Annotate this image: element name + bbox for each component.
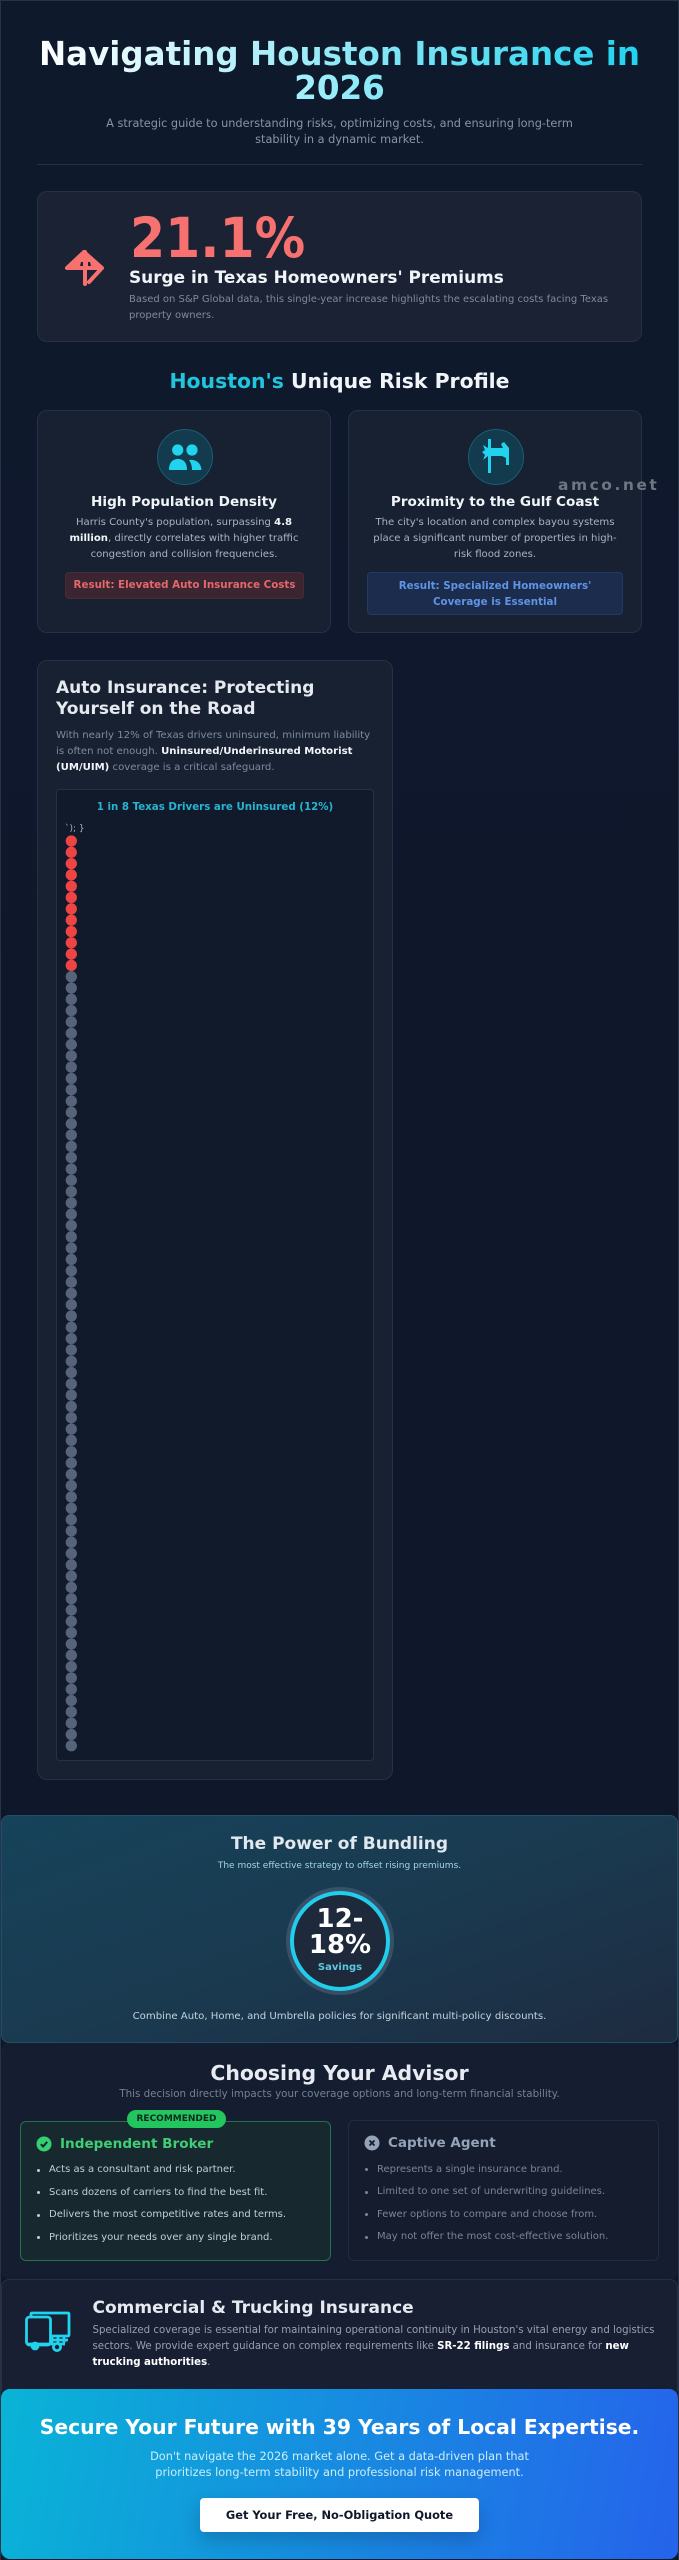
savings percentage: 18%: [309, 1930, 371, 1960]
subtitle: stability in a dynamic market.: [255, 132, 424, 146]
big number: 21.1%: [130, 205, 305, 270]
stat description: property owners.: [129, 310, 214, 320]
advisor subtitle: This decision directly impacts your coverage options and long-term financial stability.: [119, 2088, 560, 2100]
cta subtitle: prioritizes long-term stability and professional risk management.: [155, 2465, 524, 2479]
card body: place a significant number of properties in high-: [373, 533, 617, 544]
subtitle: [106, 116, 573, 146]
agent list: [365, 2164, 608, 2242]
card body: Harris County's population, surpassing 4.8: [76, 517, 292, 528]
icon: x circle: [364, 2136, 380, 2150]
card body: million, directly correlates with higher traffic: [69, 533, 298, 544]
broker list: Scans dozens of carriers to find the best fit.: [49, 2187, 267, 2198]
result callout: [367, 572, 623, 615]
card body: The city's location and complex bayou systems: [375, 517, 615, 528]
panel: commercial and trucking: [1, 2279, 678, 2397]
chart title: 1 in 8 Texas Drivers are Uninsured (12%): [97, 801, 333, 813]
panel: choosing your advisor: [1, 2043, 678, 2279]
result callout: Result: Specialized Homeowners': [399, 580, 591, 592]
stat heading: Surge in Texas Homeowners' Premiums: [129, 267, 504, 287]
auto description: (UM/UIM) coverage is a critical safeguard.: [56, 762, 275, 773]
header divider: [37, 164, 642, 165]
savings label: Savings: [318, 1962, 362, 1973]
auto description: [56, 730, 370, 773]
auto heading: Auto Insurance: Protecting: [56, 678, 314, 698]
recommended badge: [127, 2110, 226, 2128]
auto description: With nearly 12% of Texas drivers uninsured, minimum liability: [56, 730, 370, 741]
icon: check circle: [36, 2136, 52, 2152]
savings percentage: [309, 1904, 371, 1960]
dot chart: uninsured drivers: [66, 835, 77, 1752]
panel: uninsured drivers chart: [56, 789, 374, 1761]
broker list: [37, 2164, 286, 2243]
card body: risk flood zones.: [454, 549, 536, 560]
commercial body: Specialized coverage is essential for maintaining operational continuity in Houston's vital energy and logistics: [92, 2325, 654, 2336]
red dots: uninsured: [66, 841, 77, 966]
cta button: [200, 2498, 479, 2532]
result callout: Result: Elevated Auto Insurance Costs: [74, 579, 295, 591]
agent list: Fewer options to compare and choose from.: [377, 2209, 597, 2220]
agent list: May not offer the most cost-effective solution.: [377, 2231, 608, 2242]
cta title: Secure Your Future with 39 Years of Local Expertise.: [40, 2415, 639, 2439]
result callout: Coverage is Essential: [433, 596, 557, 608]
bundling subtitle: The most effective strategy to offset rising premiums.: [218, 1861, 461, 1871]
auto heading: [56, 678, 314, 719]
card body: congestion and collision frequencies.: [91, 549, 277, 560]
broker heading: Independent Broker: [60, 2136, 213, 2152]
card heading: Proximity to the Gulf Coast: [391, 494, 599, 510]
broker list: Delivers the most competitive rates and terms.: [49, 2209, 286, 2220]
auto heading: Yourself on the Road: [56, 699, 256, 719]
card body: [69, 517, 298, 560]
icon: people: [157, 429, 213, 485]
subtitle: A strategic guide to understanding risks, optimizing costs, and ensuring long-term: [106, 116, 573, 130]
card body: [373, 517, 617, 560]
watermark: amco.net: [558, 476, 659, 494]
panel: independent broker: [20, 2121, 331, 2261]
panel: high population density: [37, 410, 331, 633]
commercial body: sectors. We provide expert guidance on complex requirements like SR-22 filings and insurance for new: [92, 2341, 629, 2352]
icon: truck: [25, 2312, 70, 2352]
agent heading: Captive Agent: [388, 2135, 496, 2151]
header: [37, 35, 642, 165]
commercial body: [92, 2325, 654, 2368]
icon: surge arrow: [64, 250, 104, 286]
stray code text: `); }: [65, 824, 85, 834]
cta button: Get Your Free, No-Obligation Quote: [226, 2508, 453, 2522]
auto description: is often not enough. Uninsured/Underinsured Motorist: [56, 746, 352, 757]
panel: auto insurance: [37, 660, 393, 1780]
gray dots: insured: [66, 977, 77, 1747]
agent list: Represents a single insurance brand.: [377, 2164, 563, 2174]
icon: flood marker: [468, 429, 524, 485]
bundling title: The Power of Bundling: [231, 1834, 448, 1854]
savings circle: [290, 1891, 390, 1991]
cta subtitle: [150, 2449, 529, 2479]
cta subtitle: Don't navigate the 2026 market alone. Get a data-driven plan that: [150, 2449, 529, 2463]
panel: captive agent: [348, 2120, 659, 2261]
recommended badge: RECOMMENDED: [136, 2114, 216, 2124]
result callout: [65, 572, 304, 599]
card heading: High Population Density: [91, 494, 277, 510]
title: Navigating Houston Insurance in: [39, 35, 640, 73]
agent list: Limited to one set of underwriting guidelines.: [377, 2186, 605, 2197]
broker list: Acts as a consultant and risk partner.: [49, 2164, 236, 2175]
panel: premium surge stat: [37, 191, 642, 342]
broker list: Prioritizes your needs over any single brand.: [49, 2232, 273, 2243]
title: [0, 37, 679, 105]
title: 2026: [294, 69, 385, 107]
panel: power of bundling: [1, 1815, 678, 2043]
stat description: Based on S&P Global data, this single-year increase highlights the escalating costs facing Texas: [129, 294, 608, 304]
panel: proximity to gulf coast: [348, 410, 642, 633]
stat description: [129, 294, 608, 320]
commercial body: trucking authorities.: [92, 2357, 210, 2368]
advisor title: Choosing Your Advisor: [210, 2061, 469, 2085]
panel: call to action: [1, 2389, 678, 2559]
commercial heading: Commercial & Trucking Insurance: [92, 2298, 414, 2318]
bundling caption: Combine Auto, Home, and Umbrella policies for significant multi-policy discounts.: [133, 2011, 546, 2022]
savings percentage: 12-: [316, 1904, 363, 1934]
section heading: risk profile: Houston's Unique Risk Profile: [169, 368, 510, 392]
